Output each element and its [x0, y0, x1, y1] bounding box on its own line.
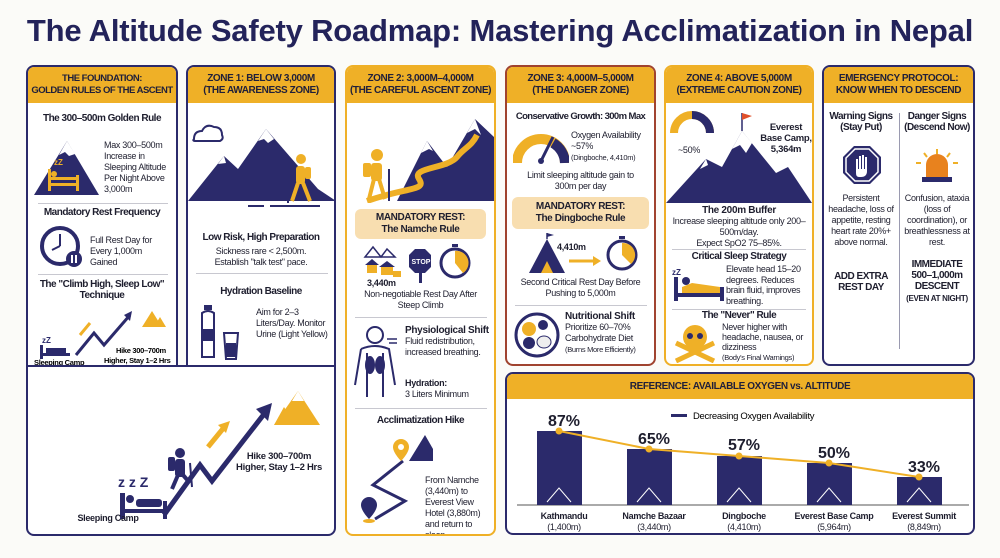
chart: oxygen bars: (5,964m) [817, 522, 851, 532]
column: warning signs: Persistent headache, loss of appetite, resting heart rate 20%+ above normal. [828, 193, 894, 247]
text: physiological shift: Physiological Shift [405, 325, 489, 336]
text: hydration [405, 378, 469, 399]
text: critical sleep: Critical Sleep Strategy [692, 251, 786, 262]
chart: oxygen bars: 87% [548, 413, 580, 430]
column: danger signs: 500–1,000m [911, 270, 963, 281]
text: rest frequency: Mandatory Rest Frequency [44, 207, 160, 218]
column: warning signs: Warning Signs [829, 111, 893, 122]
text: never rule: The "Never" Rule [702, 310, 776, 321]
column: warning signs: REST DAY [838, 282, 884, 293]
heading: foundation: GOLDEN RULES OF THE ASCENT [31, 85, 173, 96]
text: hike higher: Hike 300–700m [247, 451, 311, 462]
icon: climb high large [118, 391, 320, 519]
heading: emergency [824, 67, 973, 103]
heading: zone 4: (EXTREME CAUTION ZONE) [676, 85, 802, 96]
icon: everest mountain gauge [666, 111, 812, 203]
heading: zone 1 [188, 67, 334, 103]
callout: namche rule: MANDATORY REST: [376, 212, 465, 223]
chart: oxygen bars: Everest Summit [892, 511, 956, 521]
text: oxygen 57: Oxygen Availability ~57% [571, 130, 641, 151]
panel: zone 1: Establish "talk test" pace. [215, 257, 307, 267]
panel: zone 4 [664, 65, 814, 366]
text: non-negotiable: 3,440m [367, 278, 396, 288]
icon: clock pause [40, 226, 82, 267]
text: everest base camp: Everest Base Camp, 5,364m [760, 122, 812, 155]
column: danger signs: Danger Signs [908, 111, 966, 122]
icon: climb high small: Sleeping Camp [34, 358, 85, 367]
icon: climb high small [34, 311, 171, 367]
icon: village stop clock: STOP [412, 259, 431, 266]
panel: zone 2: Steep Climb [398, 300, 443, 310]
callout: namche rule: The Namche Rule [382, 224, 459, 235]
text: sleeping camp: Sleeping Camp [77, 513, 139, 523]
heading: zone 2: (THE CAREFUL ASCENT ZONE) [350, 85, 491, 96]
panel: zone 2: Non-negotiable Rest Day After [364, 289, 477, 299]
text: hydration: 3 Liters Minimum [405, 389, 469, 399]
text: aim for: Aim for 2–3 Liters/Day. Monitor Urine (Light Yellow) [256, 307, 328, 339]
column: danger signs: IMMEDIATE [912, 259, 962, 270]
heading: zone 4: ZONE 4: ABOVE 5,000M [686, 73, 792, 84]
text: limit sleeping: 300m per day [555, 181, 606, 191]
text: 200m buffer: The 200m Buffer [702, 205, 776, 216]
column: danger signs: DESCENT [915, 281, 959, 292]
chart: oxygen bars: Dingboche [722, 511, 766, 521]
icon: mountain bed: zZ [54, 158, 63, 167]
text: low risk: Low Risk, High Preparation [202, 232, 320, 243]
text: climb high: The "Climb High, Sleep Low" Technique [40, 279, 164, 301]
panel: zone 4: ~50% [678, 145, 700, 155]
icon: mountain hiker [188, 124, 334, 207]
panel: foundation [26, 65, 178, 367]
text: 200m buffer: Expect SpO2 75–85%. [696, 238, 782, 248]
icon: camp arrow timer [529, 233, 638, 273]
heading: zone 1: (THE AWARENESS ZONE) [203, 85, 319, 96]
text: second critical: Pushing to 5,000m [546, 288, 615, 298]
text: physiological shift: Fluid redistribution, increased breathing. [405, 336, 481, 357]
text: never higher: (Body's Final Warnings) [722, 353, 794, 362]
icon: siren [916, 149, 958, 182]
text: hike higher [236, 451, 322, 473]
panel: zone 3: 4,410m [557, 242, 586, 252]
icon: climb high small: zZ [42, 336, 51, 345]
heading: zone 3: ZONE 3: 4,000M–5,000M [527, 73, 634, 84]
text: limit sleeping: Limit sleeping altitude gain to [527, 170, 634, 180]
chart: oxygen bars: 65% [638, 431, 670, 448]
callout: dingboche rule: MANDATORY REST: [536, 201, 625, 212]
icon: climb high large: z z Z [118, 474, 149, 490]
icon: skull [675, 325, 715, 363]
heading: zone 3 [507, 67, 654, 103]
text: oxygen 57 [571, 130, 641, 162]
heading: foundation: THE FOUNDATION: [62, 73, 142, 84]
text: elevate head: Elevate head 15–20 degrees. Reduces brain fluid, improves breathing. [726, 264, 801, 306]
text: never higher: Never higher with headache, nausea, or dizziness [722, 322, 803, 352]
text: nutritional shift: (Burns More Efficiently) [565, 345, 636, 354]
text: nutritional shift [565, 311, 636, 354]
text: limit sleeping [527, 170, 634, 191]
title: The Altitude Safety Roadmap: Mastering Acclimatization in Nepal [27, 13, 973, 48]
text: nutritional shift: Prioritize 60–70% Carbohydrate Diet [565, 322, 633, 343]
text: second critical: Second Critical Rest Day Before [521, 277, 640, 287]
text: 200m buffer [673, 205, 806, 248]
heading: zone 2 [347, 67, 494, 103]
chart: oxygen bars: 57% [728, 437, 760, 454]
text: hydration: Hydration: [405, 378, 447, 388]
icon: body [354, 326, 397, 397]
heading: zone 1: ZONE 1: BELOW 3,000M [207, 73, 315, 84]
heading: zone 2: ZONE 2: 3,000M–4,000M [367, 73, 474, 84]
chart: oxygen bars [517, 411, 969, 532]
chart: oxygen bars: (4,410m) [727, 522, 761, 532]
text: second critical [521, 277, 640, 298]
chart: oxygen bars: 50% [818, 445, 850, 462]
text: hike higher: Higher, Stay 1–2 Hrs [236, 462, 322, 473]
column: warning signs: ADD EXTRA [834, 271, 888, 282]
panel: zone 1: Sickness rare < 2,500m. [216, 246, 306, 256]
column: warning signs: (Stay Put) [840, 122, 882, 133]
text: nutritional shift: Nutritional Shift [565, 311, 635, 322]
icon: water bottle [201, 305, 240, 360]
icon: trail mountains [363, 119, 494, 203]
column: danger signs: Confusion, ataxia (loss of coordination), or breathlessness at rest. [904, 193, 970, 247]
panel: emergency protocol [822, 65, 975, 366]
icon: village stop clock [364, 244, 470, 283]
text: full rest day: Full Rest Day for Every 1,000m Gained [90, 235, 152, 267]
heading: chart: REFERENCE: AVAILABLE OXYGEN vs. ALTITUDE [630, 381, 850, 392]
column: danger signs: (EVEN AT NIGHT) [906, 294, 968, 303]
chart: oxygen bars: Everest Base Camp [795, 511, 874, 521]
panel: oxygen chart [505, 372, 975, 535]
chart: oxygen bars: (1,400m) [547, 522, 581, 532]
callout: dingboche rule: The Dingboche Rule [536, 213, 625, 224]
text: 200m buffer: Increase sleeping altitude only 200–500m/day. [673, 216, 805, 237]
heading: zone 3: (THE DANGER ZONE) [532, 85, 629, 96]
text: conservative growth: Conservative Growth: 300m Max [516, 111, 645, 122]
chart: oxygen bars: Kathmandu [541, 511, 587, 521]
icon: elevated bed [672, 268, 724, 301]
panel: zone 3 [505, 65, 656, 366]
column: warning signs [828, 111, 894, 293]
icon: route [361, 435, 433, 523]
text: acclimatization hike: Acclimatization Hike [377, 415, 464, 426]
legend: Decreasing Oxygen Availability [693, 411, 815, 422]
heading: emergency: KNOW WHEN TO DESCEND [836, 85, 961, 96]
chart: oxygen bars: (3,440m) [637, 522, 671, 532]
callout: dingboche rule [512, 197, 649, 229]
heading: zone 4 [666, 67, 812, 103]
icon: stop hand [843, 146, 881, 184]
chart: oxygen bars: (8,849m) [907, 522, 941, 532]
heading: foundation [28, 67, 176, 103]
icon: climb high small: Hike 300–700m [116, 346, 167, 355]
chart: oxygen bars: 33% [908, 459, 940, 476]
text: oxygen 57: (Dingboche, 4,410m) [571, 153, 635, 162]
heading: chart [507, 374, 973, 399]
text: max increase: Max 300–500m Increase in Sleeping Altitude Per Night Above 3,000m [104, 140, 166, 194]
callout: namche rule [355, 209, 486, 239]
text: hydration baseline: Hydration Baseline [220, 286, 302, 297]
column: danger signs [904, 111, 970, 303]
icon: climb high small: Higher, Stay 1–2 Hrs [104, 356, 171, 365]
panel: zone 1 [186, 65, 336, 367]
icon: elevated bed: zZ [672, 268, 681, 277]
panel: climb high illustration [26, 365, 336, 536]
text: golden rule: The 300–500m Golden Rule [43, 113, 161, 124]
heading: emergency: EMERGENCY PROTOCOL: [839, 73, 958, 84]
panel: zone 2 [345, 65, 496, 536]
text: physiological shift [405, 325, 489, 357]
icon: gauge 57 [513, 134, 569, 164]
column: danger signs: (Descend Now) [904, 122, 970, 133]
icon: mountain bed [34, 141, 99, 195]
icon: food plate [514, 312, 560, 358]
chart: oxygen bars: Namche Bazaar [622, 511, 686, 521]
